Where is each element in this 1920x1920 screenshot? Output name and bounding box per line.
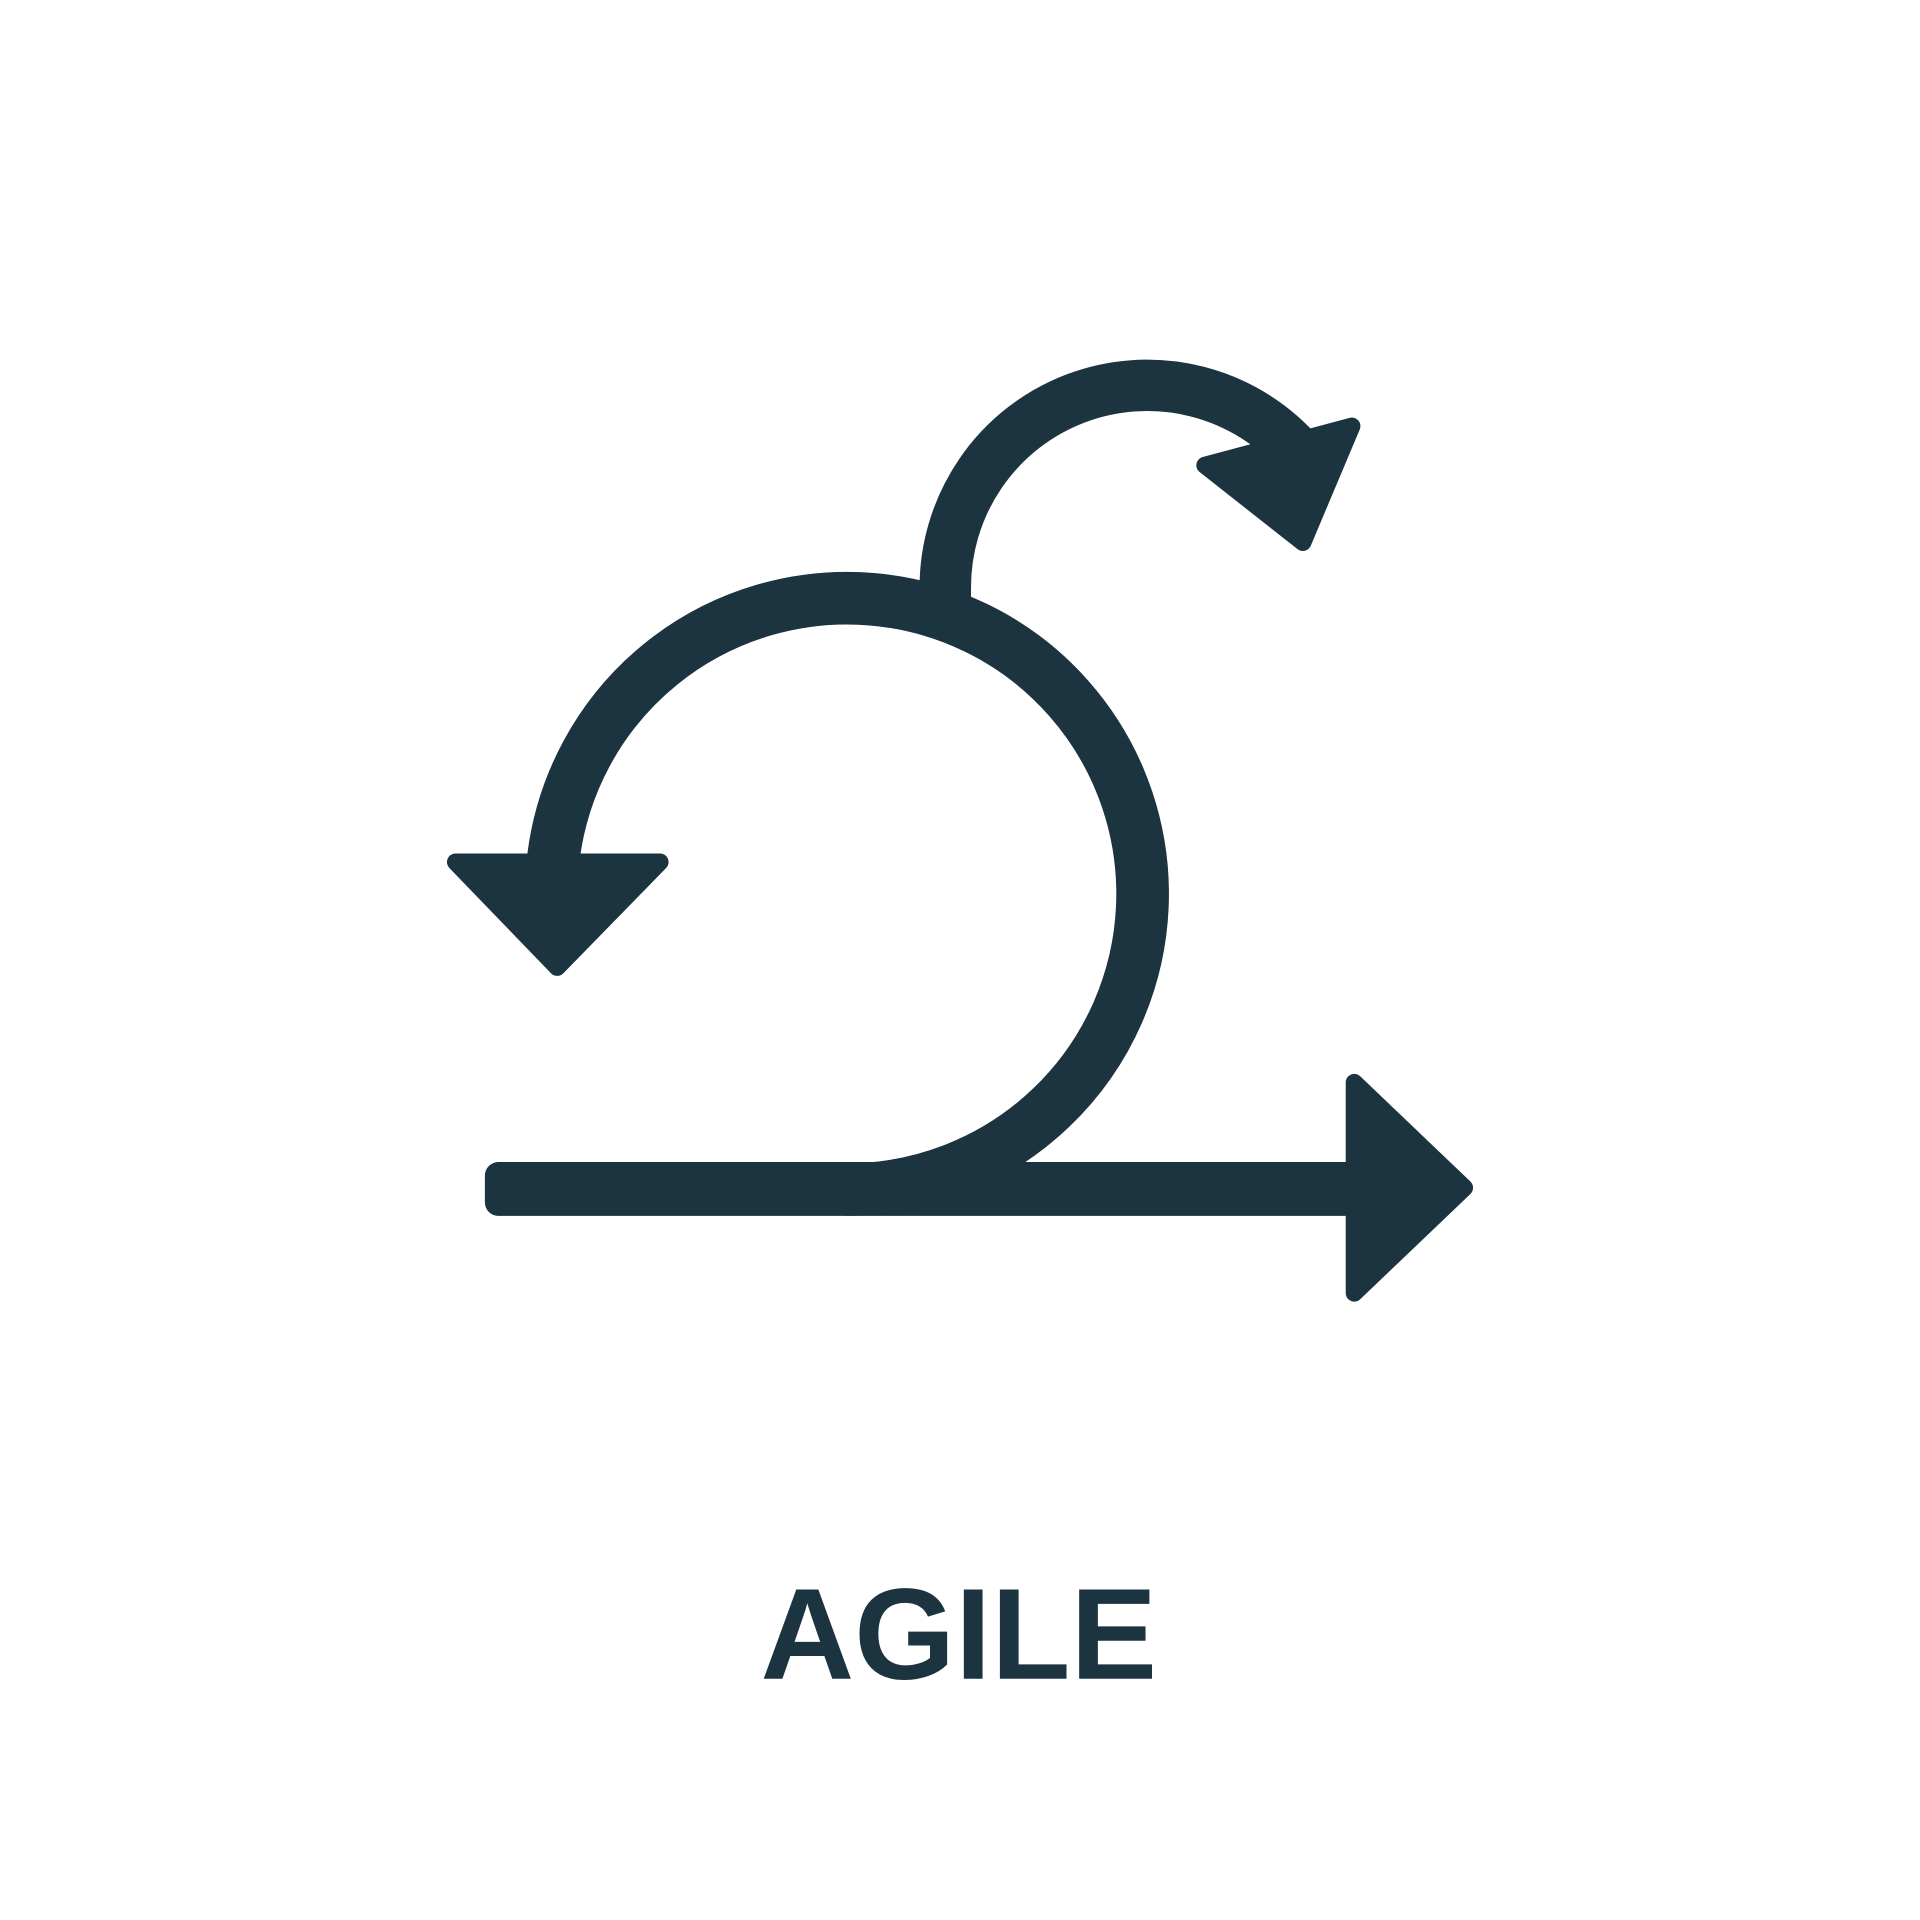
arrowhead: left down	[456, 862, 660, 967]
arrowhead: upper right	[1205, 426, 1352, 542]
small upper loop arc	[945, 385, 1300, 612]
icon: agile loop arrow	[456, 385, 1464, 1293]
large loop arc	[553, 598, 1143, 1190]
label: AGILE: AGILE	[760, 1562, 1157, 1707]
arrowhead: right	[1354, 1082, 1464, 1293]
horizontal arrow bar	[485, 1162, 1367, 1216]
